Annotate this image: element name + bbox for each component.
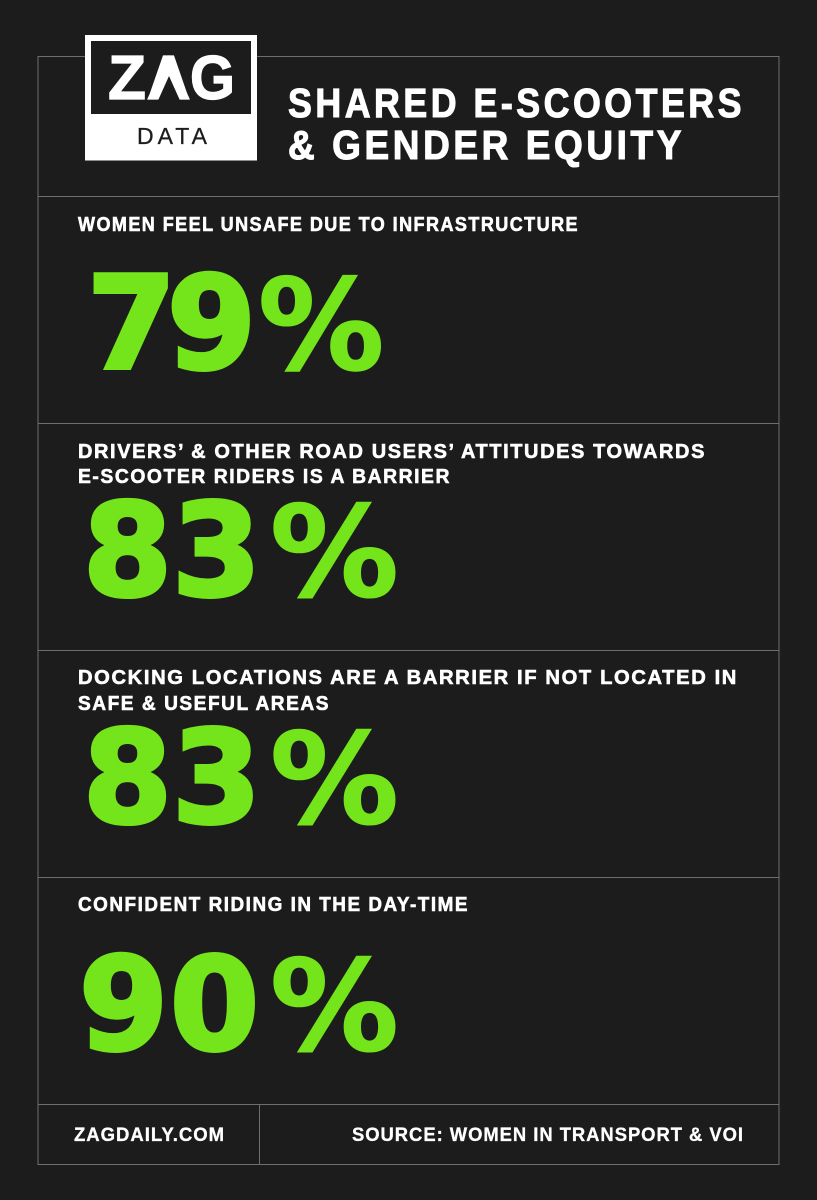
heading: docking xyxy=(78,667,738,715)
logo wordmark xyxy=(108,44,235,113)
title xyxy=(288,80,745,168)
stat: 79%: % xyxy=(258,252,384,399)
heading: attitudes: E-SCOOTER RIDERS IS A BARRIER xyxy=(78,466,451,488)
stat: 83%: % xyxy=(270,707,399,854)
panel: attitudes xyxy=(78,441,706,627)
stat: 79% xyxy=(87,250,384,399)
stat: 83%: % xyxy=(270,480,399,627)
logo subtitle: DATA xyxy=(137,123,208,149)
stat: 83%: 83 xyxy=(83,704,261,853)
stat: 90%: 90 xyxy=(79,931,259,1080)
heading: confidence: CONFIDENT RIDING IN THE DAY-TIME xyxy=(78,894,469,916)
heading: attitudes xyxy=(78,441,706,488)
logo wordmark: Z xyxy=(108,44,146,113)
logo wordmark: A xyxy=(147,44,190,113)
stat: 79%: 79 xyxy=(87,250,256,399)
stat: 90%: % xyxy=(270,934,399,1081)
footer: website: ZAGDAILY.COM xyxy=(74,1125,225,1146)
stat: 83%: 83 xyxy=(83,477,261,626)
logo: ZAG Data xyxy=(85,35,257,160)
title: & GENDER EQUITY xyxy=(288,122,685,168)
panel: docking xyxy=(78,667,738,854)
heading: docking: DOCKING LOCATIONS ARE A BARRIER IF NOT LOCATED IN xyxy=(78,667,738,689)
heading: attitudes: DRIVERS’ & OTHER ROAD USERS’ ATTITUDES TOWARDS xyxy=(78,441,706,463)
stat: 83% xyxy=(83,704,399,854)
footer: source: SOURCE: WOMEN IN TRANSPORT & VOI xyxy=(352,1125,744,1146)
heading: infrastructure: WOMEN FEEL UNSAFE DUE TO INFRASTRUCTURE xyxy=(78,214,579,236)
panel: confidence xyxy=(78,894,469,1081)
logo wordmark: G xyxy=(190,44,235,113)
panel: infrastructure xyxy=(78,214,579,399)
heading: docking: SAFE & USEFUL AREAS xyxy=(78,693,330,715)
stat: 83% xyxy=(83,477,399,627)
stat: 90% xyxy=(79,931,399,1081)
title: SHARED E-SCOOTERS xyxy=(288,80,745,126)
